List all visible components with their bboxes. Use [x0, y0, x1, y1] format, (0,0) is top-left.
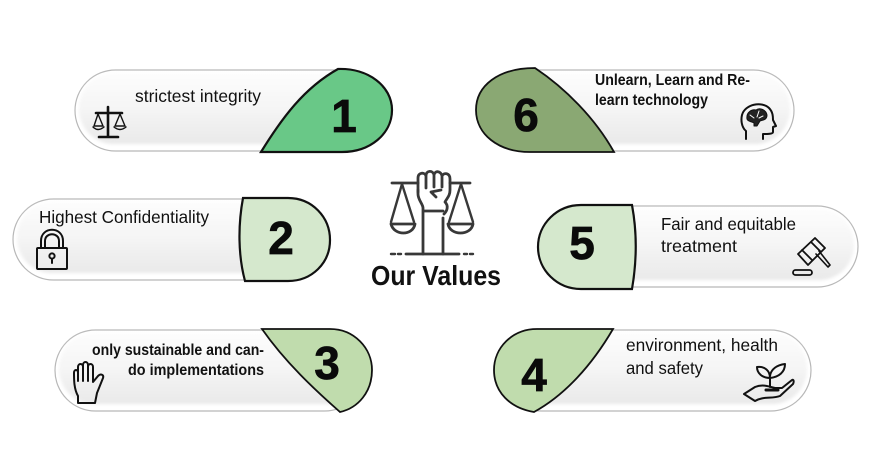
panel: value 2 highest confidentiality — [13, 198, 330, 281]
badge: number 6: 6 — [513, 89, 539, 141]
badge: number 3: 3 — [314, 337, 340, 389]
icon: fist holding scales of justice — [391, 171, 473, 254]
text: only sustainable and can-do implementations: do implementations — [128, 362, 264, 379]
text: Highest Confidentiality: Highest Confidentiality — [39, 207, 209, 227]
badge: number 4: 4 — [521, 349, 547, 401]
panel: value 6 unlearn learn relearn — [476, 68, 794, 152]
text: environment, health and safety: environment, health — [626, 335, 778, 355]
icon: gavel — [793, 238, 830, 275]
panel: value 1 strictest integrity — [75, 69, 392, 152]
icon: balance scale — [93, 107, 126, 137]
text: Fair and equitable treatment: treatment — [661, 236, 737, 256]
badge: number 1: 1 — [331, 90, 357, 142]
badge: number 2 — [239, 198, 330, 281]
text: environment, health and safety: and safety — [626, 358, 703, 378]
badge: number 4 — [494, 329, 613, 412]
text: Unlearn, Learn and Re-learn technology — [595, 72, 750, 109]
icon: open hand — [74, 362, 103, 403]
panel: value 3 sustainable implementations — [55, 329, 372, 412]
badge: number 1 — [261, 69, 392, 152]
badge: number 3 — [262, 329, 372, 412]
badge: number 2: 2 — [268, 212, 294, 264]
text: only sustainable and can-do implementations — [92, 342, 264, 379]
badge: number 5: 5 — [569, 217, 595, 269]
text: environment, health and safety — [626, 335, 778, 378]
badge: number 6 — [476, 68, 614, 152]
panel: value 5 fair treatment — [538, 205, 858, 289]
text: Unlearn, Learn and Re-learn technology: Unlearn, Learn and Re- — [595, 72, 750, 89]
text: only sustainable and can-do implementations: only sustainable and can- — [92, 342, 264, 359]
panel: value 4 environment health safety — [494, 329, 811, 412]
text: strictest integrity: strictest integrity — [135, 86, 261, 106]
icon: hand holding plant — [744, 364, 794, 401]
text: Fair and equitable treatment — [661, 214, 796, 256]
icon: padlock — [37, 230, 67, 269]
icon: head with brain — [741, 104, 776, 139]
text: Fair and equitable treatment: Fair and equitable — [661, 214, 796, 234]
badge: number 5 — [538, 205, 636, 289]
text: Unlearn, Learn and Re-learn technology: learn technology — [595, 92, 708, 109]
title: Our Values: Our Values — [371, 260, 501, 291]
